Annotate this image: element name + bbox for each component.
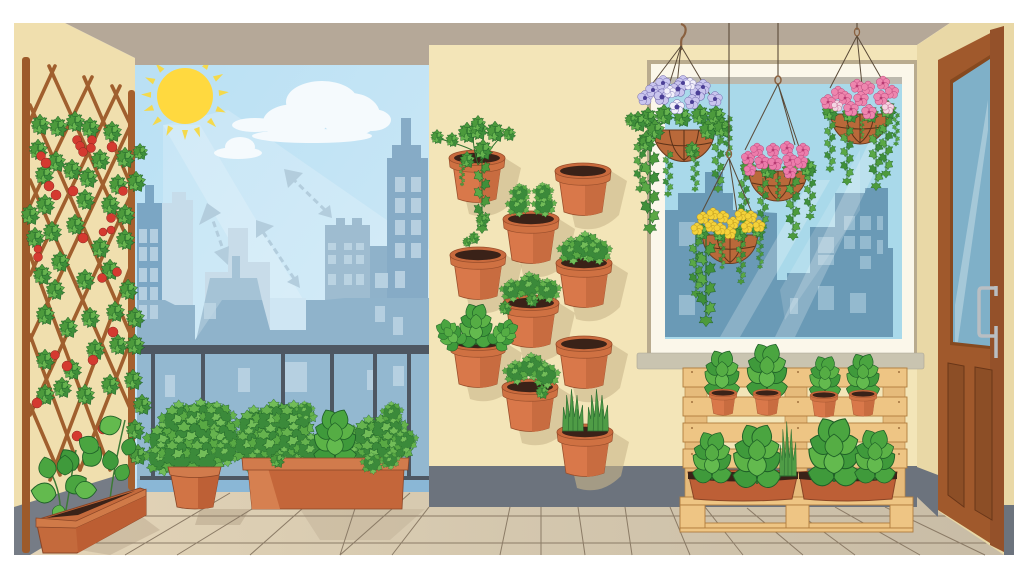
window skyline: [665, 140, 893, 337]
door: [938, 26, 1004, 552]
right side wall: [917, 23, 1014, 555]
pallet small pot plants: [701, 341, 883, 418]
back wall: [429, 45, 917, 507]
city skyline: [137, 118, 429, 495]
hanging basket: purple petunias: [623, 24, 734, 234]
sun: [141, 52, 229, 140]
hanging basket: pink right: [820, 23, 901, 191]
sunlight arrows: [199, 169, 332, 288]
floor tiles: [14, 492, 1006, 555]
long planter with herbs: [228, 399, 420, 509]
pot: bushy herb: [556, 230, 613, 308]
hanging basket: yellow: [687, 23, 767, 327]
pot: cilantro: [501, 352, 561, 432]
balcony sky opening: [135, 65, 430, 495]
pot: empty lower right: [556, 336, 612, 389]
pot: empty middle left: [450, 247, 506, 300]
pot: spreading parsley: [497, 271, 563, 348]
corner window box with seedlings: [29, 412, 146, 553]
pot: parsley sprouts: [503, 182, 559, 264]
wall pots: [428, 115, 629, 490]
door handle: [979, 286, 996, 358]
clouds: [214, 81, 391, 159]
left side wall: [14, 23, 135, 555]
hanging basket: pink centre: [736, 23, 818, 241]
tomato vine: [19, 111, 154, 468]
pallet window boxes: [688, 414, 899, 501]
seedling leaves: [29, 412, 139, 525]
ceiling: [65, 23, 950, 65]
door glass: [953, 59, 990, 346]
bowl pot with bush: [141, 398, 246, 509]
window with city view: [637, 60, 924, 369]
pallet planter: [680, 341, 913, 532]
pot: wide leaf herb: [428, 302, 526, 388]
balcony railing: [137, 345, 429, 480]
pot: empty top right: [555, 163, 611, 216]
trellis: [22, 57, 135, 553]
pot: trailing ivy: [429, 115, 517, 249]
pot: chives: [557, 389, 613, 477]
